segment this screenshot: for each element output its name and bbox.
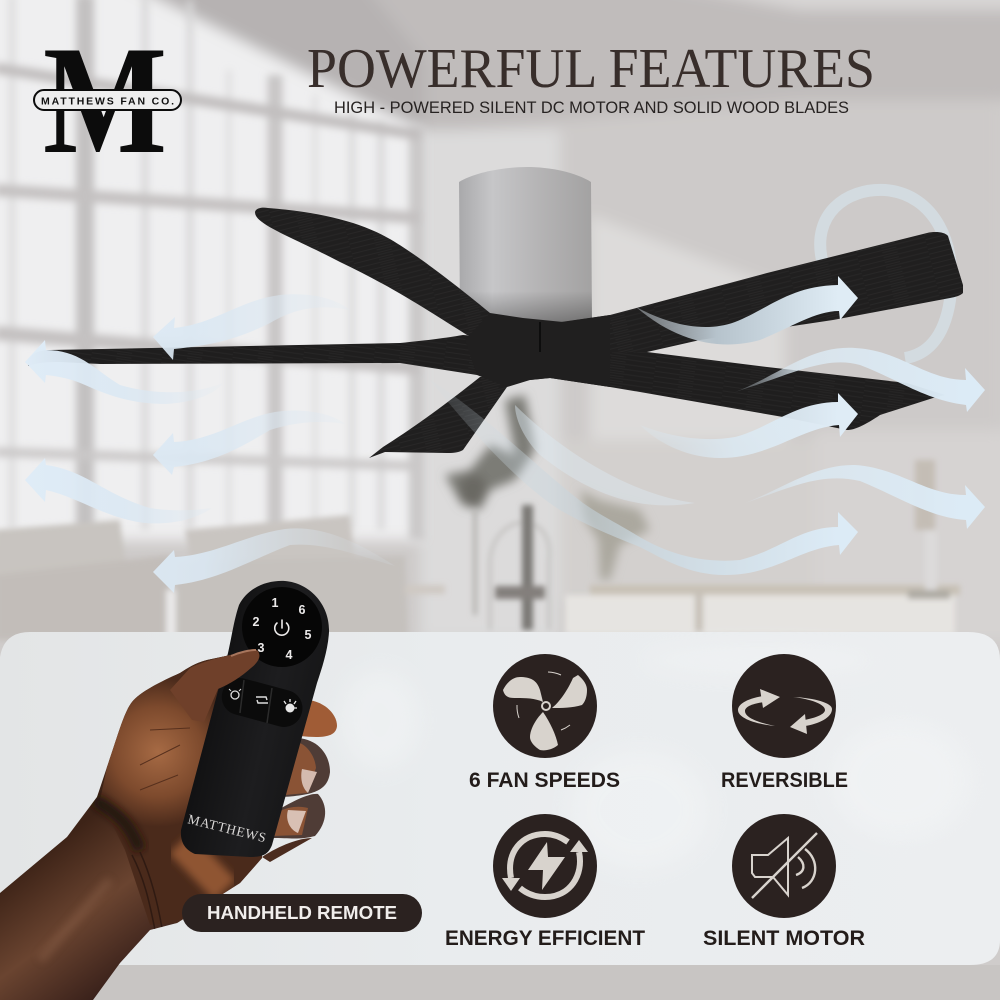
plants and console [445, 395, 960, 635]
logo badge: MATTHEWS FAN CO. [41, 96, 174, 108]
power symbol [275, 620, 289, 635]
fan blades [28, 208, 963, 458]
dial numbers: 5 [305, 628, 312, 642]
label: energy efficient: ENERGY EFFICIENT [445, 927, 645, 950]
dial numbers: 2 [253, 615, 260, 629]
dial numbers: 3 [258, 641, 265, 655]
thumb tip highlight [231, 650, 256, 656]
left arrow 4 [25, 458, 212, 523]
dial numbers: 6 [299, 603, 306, 617]
faint swirl behind fan [820, 190, 952, 358]
logo [34, 14, 181, 186]
remote control [181, 581, 329, 857]
dial numbers: 1 [272, 596, 279, 610]
fan canopy [459, 167, 592, 322]
airflow arrows [25, 276, 985, 593]
right arrow 2 [735, 348, 985, 412]
right arrow 1 [636, 276, 858, 344]
ceiling fan [28, 167, 963, 458]
thumb [170, 650, 259, 722]
label: reversible: REVERSIBLE [721, 769, 848, 792]
index finger [300, 700, 337, 737]
title: POWERFUL FEATURES [307, 38, 875, 100]
remote label: HANDHELD REMOTE [207, 902, 397, 923]
label: silent motor: SILENT MOTOR [703, 927, 865, 950]
remote brand: MATTHEWS [186, 811, 268, 845]
left arrow 5 [153, 528, 395, 593]
sofa [0, 515, 445, 640]
label: fan speeds: 6 FAN SPEEDS [469, 769, 620, 792]
pinky [262, 838, 312, 862]
logo monogram: M [43, 14, 167, 186]
middle finger [283, 738, 330, 797]
subtitle: HIGH - POWERED SILENT DC MOTOR AND SOLID WOOD BLADES [334, 99, 849, 117]
icon: energy efficient [493, 814, 597, 918]
icon: fan speeds [493, 654, 597, 758]
remote label [182, 894, 422, 932]
floor strip [0, 965, 1000, 1000]
left arrow 3 [153, 410, 345, 475]
function buttons [218, 674, 307, 731]
dial [242, 587, 322, 667]
right arrow 3 [640, 393, 858, 458]
icon: reversible [732, 654, 836, 758]
logo badge [34, 90, 181, 110]
left arrow 2 [25, 340, 223, 404]
hand holding remote [0, 581, 337, 1000]
icon: silent motor [732, 814, 836, 918]
forearm and palm [0, 653, 262, 1000]
ring finger [272, 794, 325, 838]
right arrow 5 [430, 380, 858, 575]
faint ribbon [515, 405, 695, 505]
dial numbers [253, 596, 312, 662]
remote body [181, 581, 329, 857]
panel: features [0, 632, 1000, 965]
dial numbers: 4 [286, 648, 293, 662]
fan hub [465, 313, 610, 387]
left arrow 1 [153, 294, 350, 360]
right arrow 4 [745, 465, 985, 529]
